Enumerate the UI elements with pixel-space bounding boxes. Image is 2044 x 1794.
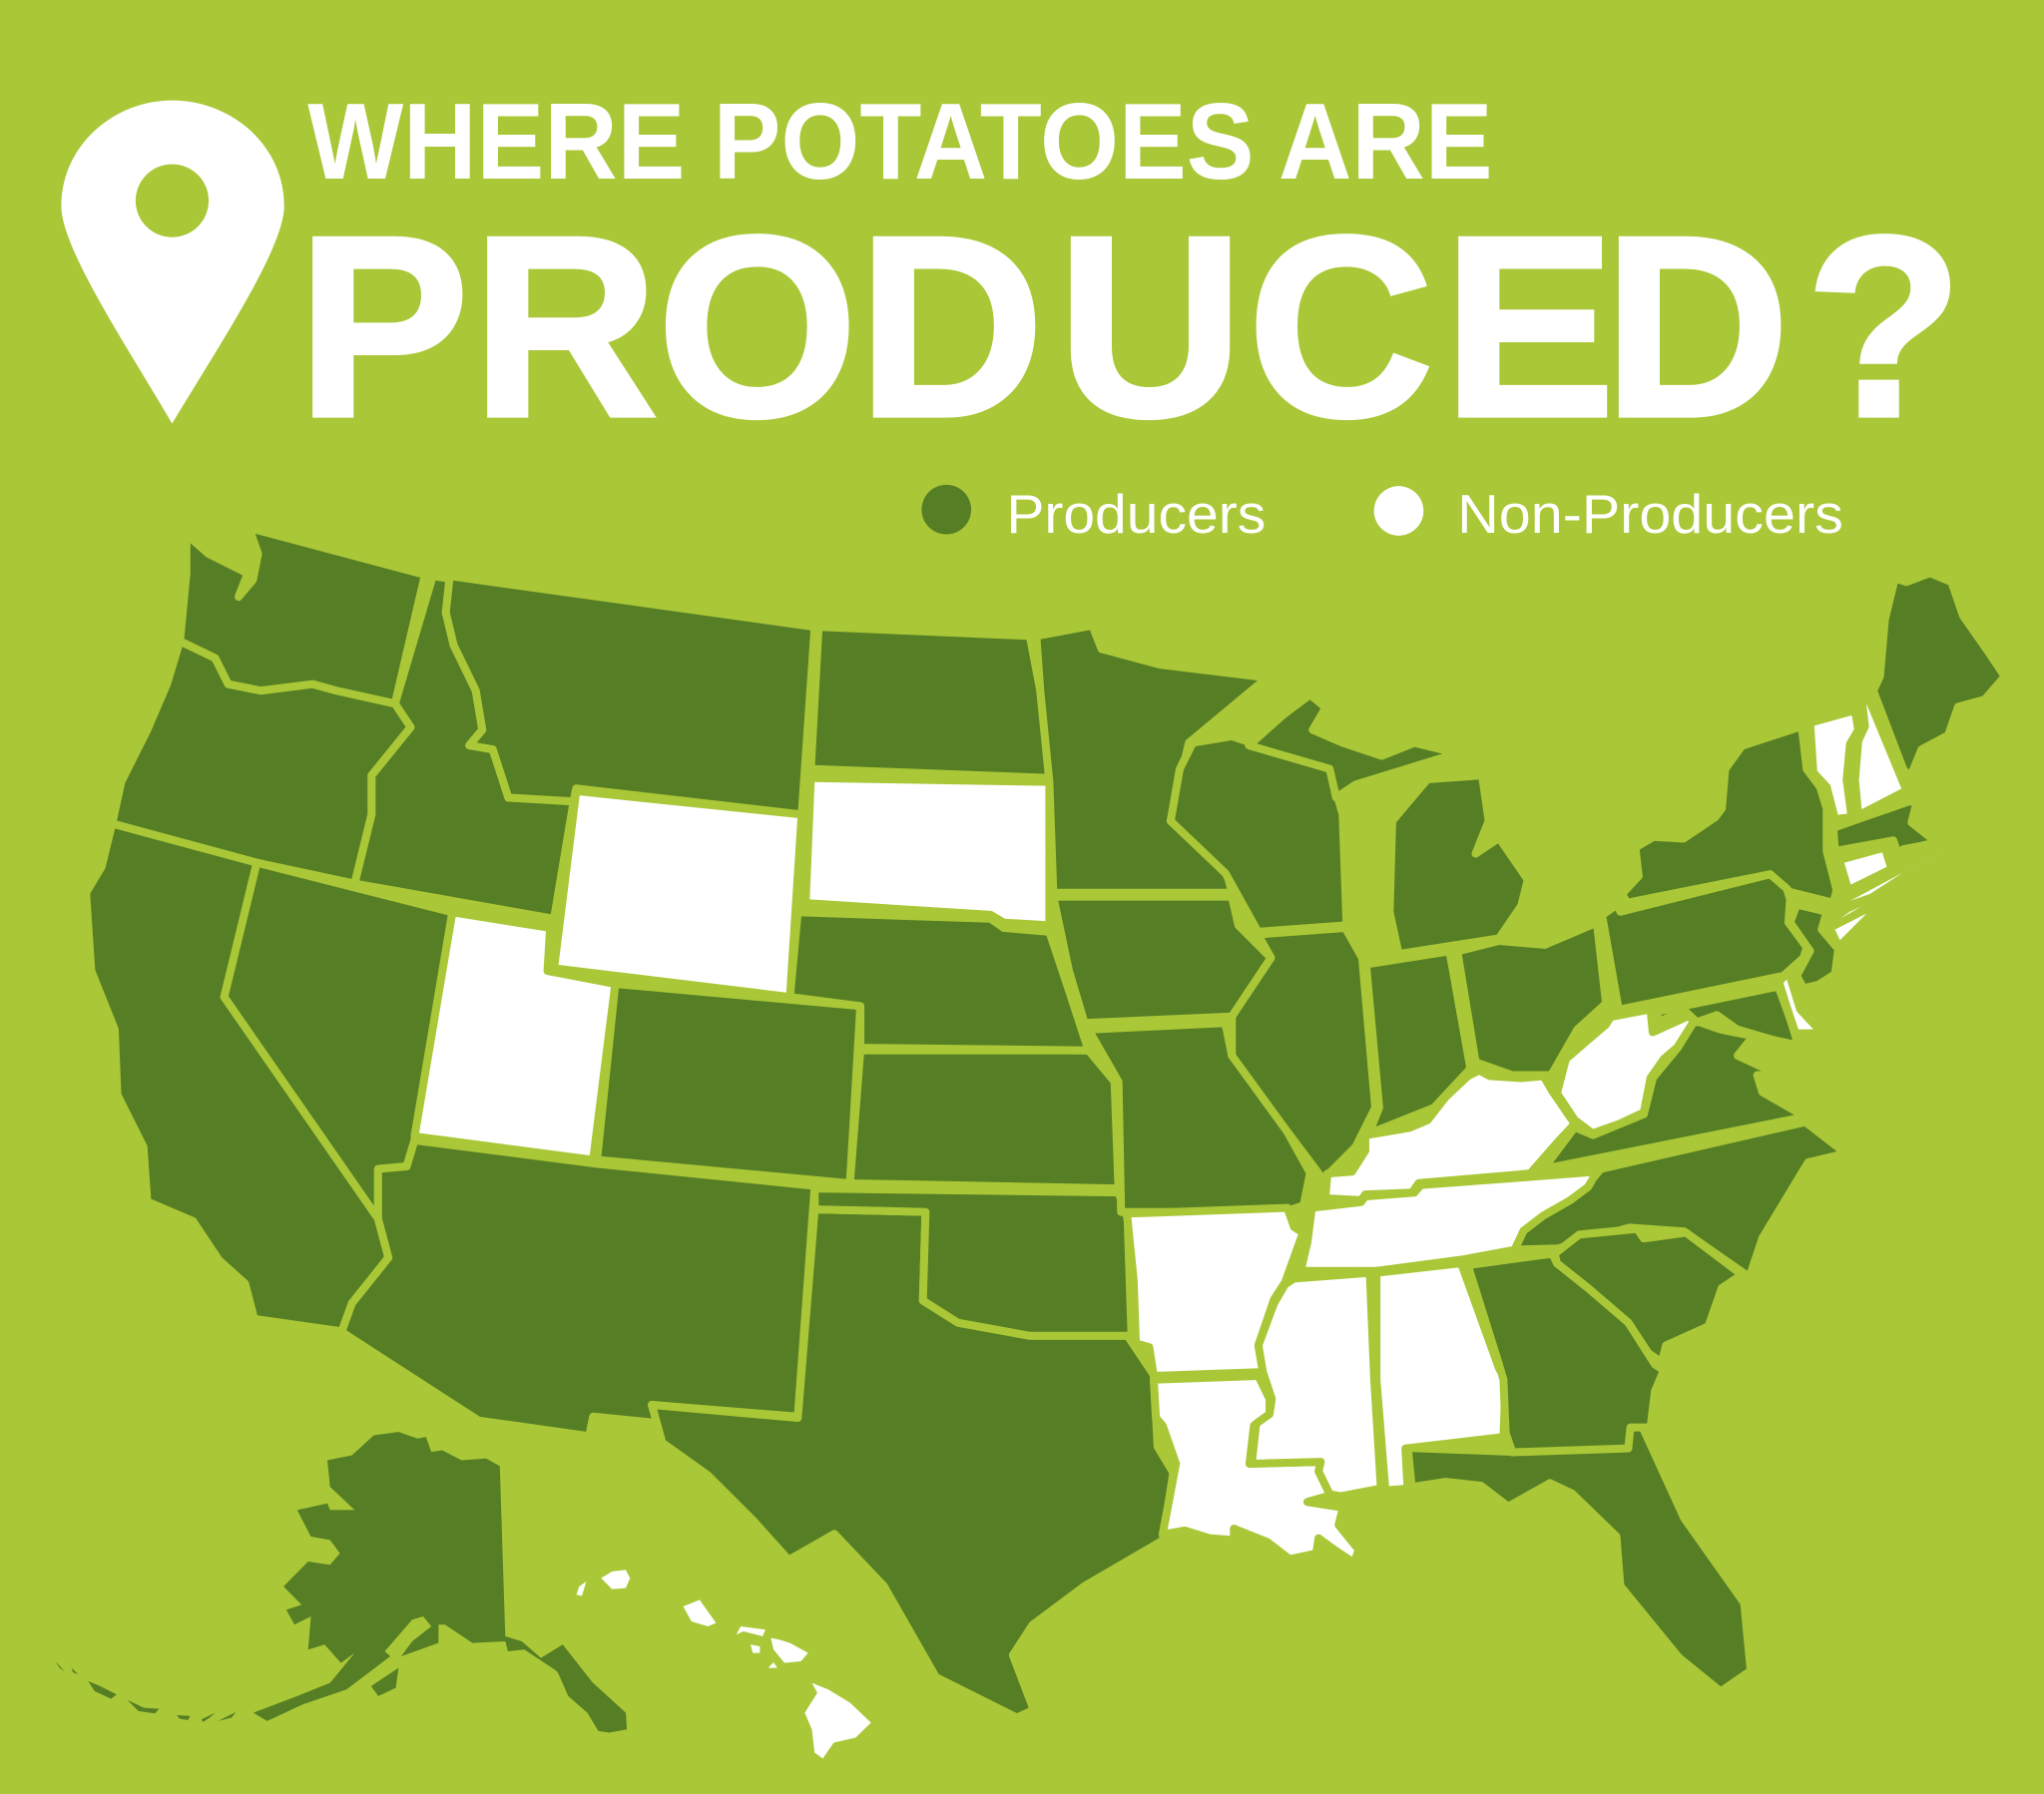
state: Vermont [1810,710,1858,819]
state: New York [1622,726,1836,903]
state: Louisiana [1154,1376,1358,1563]
state: Alaska [55,1432,627,1733]
state: Ohio [1457,923,1606,1076]
state: Indiana [1366,951,1470,1133]
state: Kansas [850,1051,1119,1188]
state: Nevada [225,863,452,1218]
state: Massachusetts [1833,801,1936,860]
northeast states [1602,573,2005,1046]
state: Virginia [1543,1021,1805,1169]
legend: producers marker [921,485,971,535]
state: South Carolina [1555,1229,1742,1363]
state: Oregon [112,642,410,884]
state: Michigan lower peninsula [1389,775,1528,954]
state: Michigan upper peninsula [1249,694,1457,797]
state: Washington [180,528,425,703]
state: Maryland [1657,987,1798,1046]
icon: location pin [61,101,284,423]
legend: non-producers marker [1374,486,1423,536]
island: coastal sliver north [1840,906,1861,919]
state: Missouri [1089,1023,1310,1212]
Alaska mainland [254,1432,627,1729]
state: Idaho [354,576,574,919]
state: Nebraska [790,912,1089,1051]
state: Iowa [1053,897,1271,1023]
state: Wisconsin [1171,736,1346,932]
state: Kentucky [1325,1071,1575,1200]
map of the United States [55,528,2005,1759]
Hawaiian islands [577,1570,871,1759]
state: North Carolina [1509,1122,1845,1277]
title line one: WHERE POTATOES ARE [307,81,1493,202]
state: Hawaii [577,1570,871,1759]
southeast states [1127,1010,1742,1563]
state: California [86,823,388,1332]
state: Colorado [597,984,860,1183]
state: New Jersey [1790,905,1838,989]
state: Georgia [1468,1253,1664,1452]
state: Maine [1873,573,2005,778]
state: Utah [414,912,615,1159]
Aleutian islands [55,1661,398,1722]
state: Pennsylvania [1602,874,1806,1010]
state: Florida [1408,1427,1751,1691]
southeast panhandle islands [557,1671,627,1733]
title line two: PRODUCED? [297,183,1963,471]
state: New Hampshire [1855,697,1906,815]
legend: producers label: Producers [1006,483,1266,545]
state: Texas [652,1209,1174,1717]
state: Wyoming [554,791,801,997]
state: Tennessee [1300,1171,1597,1271]
state: Connecticut [1839,847,1891,890]
state: Mississippi [1252,1273,1381,1497]
state: Arkansas [1127,1208,1303,1376]
states: Arizona and New Mexico [341,1140,814,1436]
state: Alabama [1376,1263,1506,1491]
state: Montana [446,576,814,814]
state: Delaware [1784,980,1813,1030]
state: North Dakota [810,627,1049,778]
island: coastal sliver [1835,913,1866,940]
state: Oklahoma [814,1188,1132,1336]
legend: non-producers label: Non-Producers [1457,483,1843,545]
island: Long Island [1850,847,1950,901]
state: South Dakota [805,778,1049,925]
state: Minnesota [1036,626,1268,893]
state: Illinois [1232,928,1375,1179]
legend [921,483,1843,545]
state: West Virginia [1557,1010,1693,1133]
